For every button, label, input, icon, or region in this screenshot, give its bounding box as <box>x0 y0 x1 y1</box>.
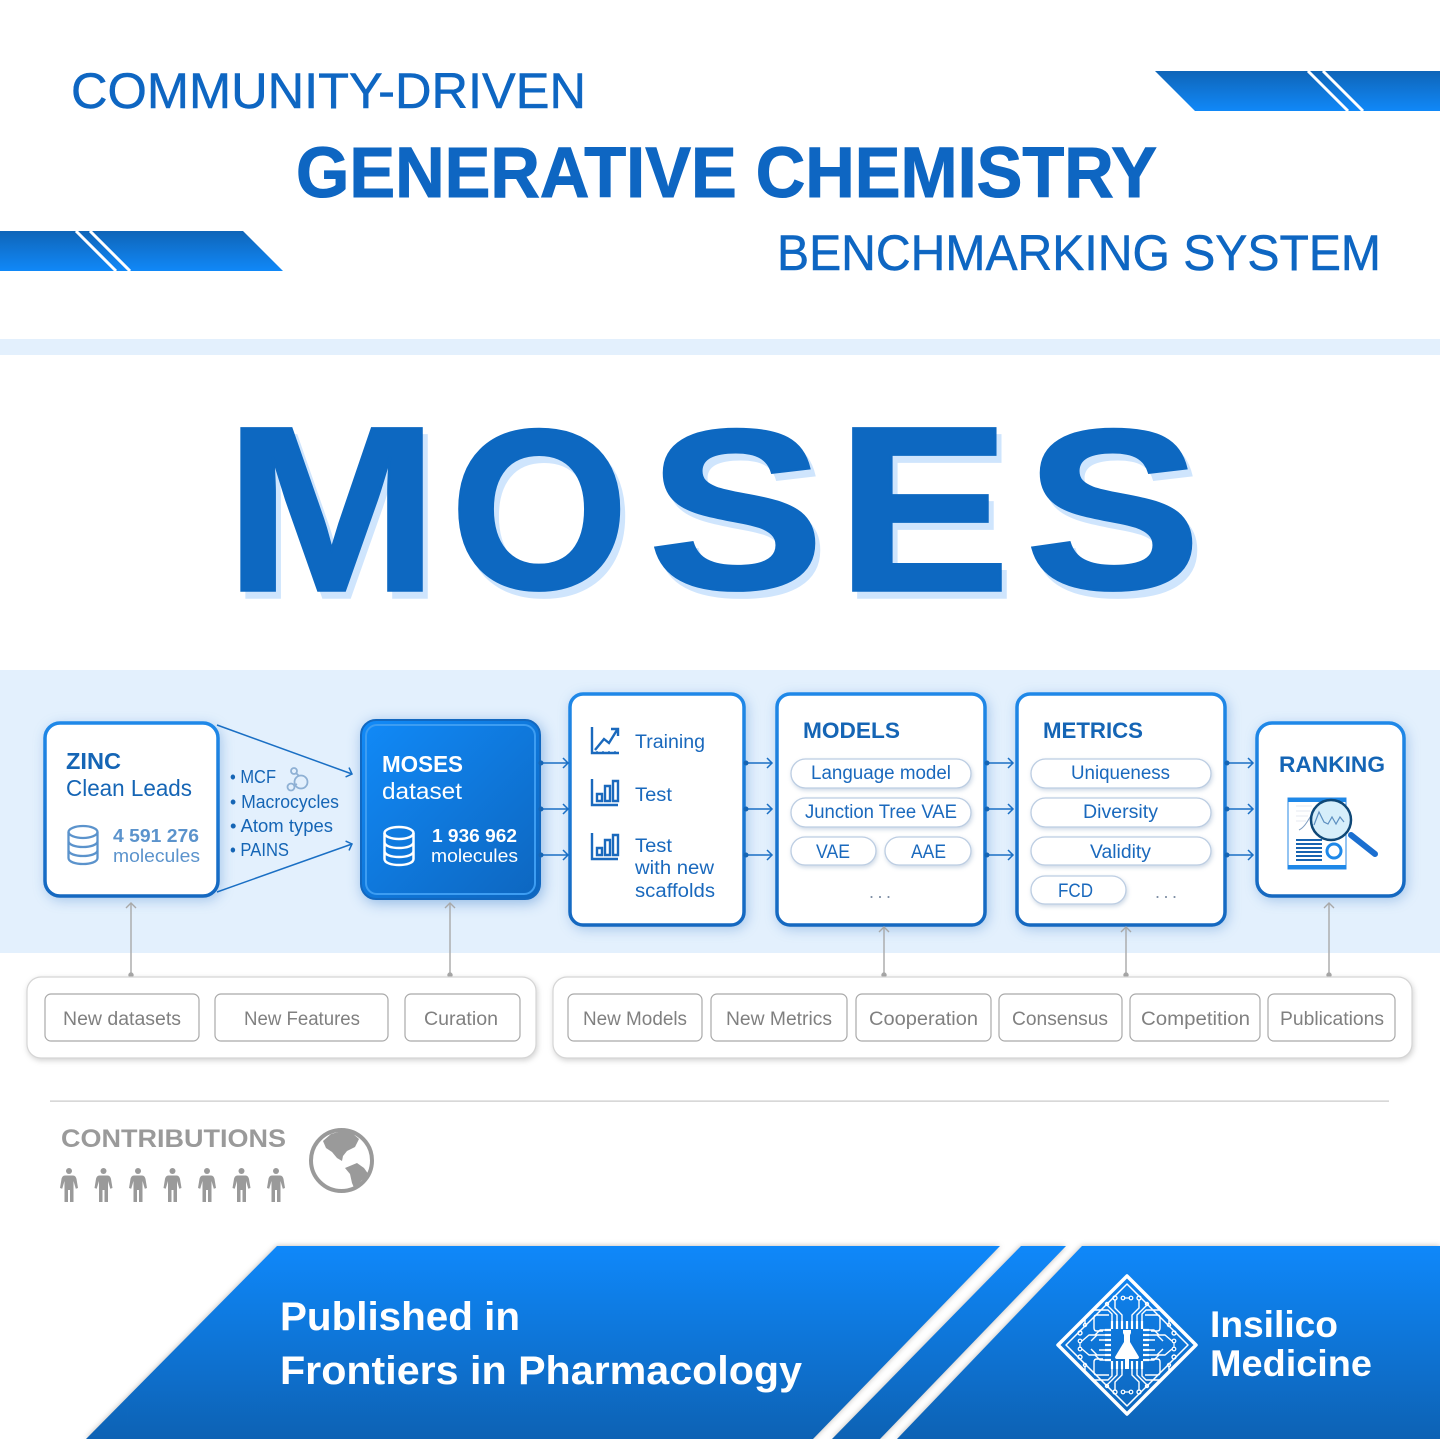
connector arrows: metrics to ranking <box>1224 758 1253 860</box>
pill: VAE <box>791 837 876 865</box>
pill: language model: Language model <box>811 763 951 784</box>
panel: metrics <box>1017 694 1225 925</box>
panel: data splits <box>570 694 744 925</box>
button: new metrics: New Metrics <box>726 1009 832 1030</box>
icon: database <box>68 826 98 864</box>
pill: language model <box>791 759 971 788</box>
test with new scaffolds label: Test <box>635 836 673 857</box>
button: new metrics <box>711 994 847 1041</box>
button: cooperation: Cooperation <box>869 1009 978 1030</box>
metrics title: METRICS <box>1043 718 1143 743</box>
pill: VAE: VAE <box>816 842 850 863</box>
button: curation: Curation <box>424 1009 498 1030</box>
panel: MOSES dataset <box>361 720 540 899</box>
connector arrows: splits to models <box>744 758 772 860</box>
MOSES wordmark <box>224 378 1201 641</box>
button: new features <box>215 994 388 1041</box>
button: new models: New Models <box>583 1009 687 1030</box>
pill: diversity: Diversity <box>1083 802 1159 823</box>
ZINC title: ZINC <box>66 748 121 774</box>
pill: validity: Validity <box>1090 842 1152 863</box>
dataset subtitle: dataset <box>382 778 463 804</box>
MOSES title: MOSES <box>382 751 463 777</box>
logo text: Insilico Medicine: Insilico <box>1210 1304 1338 1345</box>
panel: models <box>777 694 985 925</box>
pale divider band <box>0 339 1440 355</box>
connector arrows: models to metrics <box>984 758 1013 860</box>
test with new scaffolds label <box>634 836 715 902</box>
panel: ZINC clean leads <box>45 723 218 896</box>
pill: uniqueness: Uniqueness <box>1071 763 1170 784</box>
test with new scaffolds label: scaffolds <box>635 881 715 902</box>
icon: report with magnifier <box>1288 798 1375 869</box>
button: curation <box>405 994 520 1041</box>
MOSES wordmark: M <box>224 378 439 641</box>
button: new datasets: New datasets <box>63 1009 181 1030</box>
models title: MODELS <box>803 718 900 743</box>
button: competition: Competition <box>1141 1009 1250 1030</box>
filter list: • Atom types <box>230 816 333 836</box>
ellipsis: ... <box>869 882 895 902</box>
connector arrows: MOSES to splits <box>538 758 569 860</box>
button: consensus <box>999 994 1122 1041</box>
ellipsis: ... <box>1155 882 1181 902</box>
filter list: • Macrocycles <box>230 792 339 812</box>
funnel arrows from ZINC to MOSES dataset <box>217 725 354 892</box>
pill: diversity <box>1031 798 1211 827</box>
logo text: Insilico Medicine <box>1210 1304 1372 1384</box>
filter list: • PAINS <box>230 840 289 860</box>
ranking title: RANKING <box>1279 752 1385 777</box>
button: new datasets <box>45 994 199 1041</box>
button: competition <box>1130 994 1260 1041</box>
heading: benchmarking system: BENCHMARKING SYSTEM <box>777 225 1381 281</box>
heading: community-driven: COMMUNITY-DRIVEN <box>71 63 586 119</box>
test with new scaffolds label: with new <box>634 858 714 879</box>
button: publications <box>1268 994 1395 1041</box>
pill: validity <box>1031 837 1211 865</box>
logo: Insilico Medicine chip flask diamond <box>1058 1276 1196 1414</box>
pill: FCD: FCD <box>1058 881 1093 902</box>
MOSES wordmark: O <box>450 382 629 637</box>
MOSES wordmark: S <box>1025 382 1201 638</box>
panel: dataset contributions <box>27 977 536 1058</box>
pill: AAE: AAE <box>911 842 946 863</box>
icon: training chart <box>592 727 619 753</box>
MOSES wordmark: S <box>648 382 824 638</box>
top right striped banner <box>1155 71 1440 111</box>
pill: junction tree VAE: Junction Tree VAE <box>805 802 957 823</box>
footer banner <box>86 1246 1440 1439</box>
button: consensus: Consensus <box>1012 1009 1108 1030</box>
footer text: published in: Published in <box>280 1295 520 1339</box>
button: new models <box>568 994 702 1041</box>
upward contribution arrows <box>126 903 1334 977</box>
icon: database white <box>384 827 414 865</box>
button: publications: Publications <box>1280 1009 1384 1030</box>
contributions heading: CONTRIBUTIONS <box>61 1125 286 1153</box>
heading: generative chemistry: GENERATIVE CHEMISTRY <box>296 134 1157 213</box>
test label: Test <box>635 785 673 806</box>
pill: uniqueness <box>1031 759 1211 788</box>
panel: ranking <box>1257 723 1404 896</box>
pill: AAE <box>885 837 971 865</box>
icon row: contributors <box>60 1168 285 1202</box>
MOSES wordmark: E <box>836 378 1011 641</box>
logo text: Insilico Medicine: Medicine <box>1210 1343 1372 1384</box>
icon: molecule <box>288 768 308 790</box>
panel: community contributions <box>553 977 1412 1058</box>
left striped banner <box>0 231 283 271</box>
filter list: • MCF <box>230 767 276 787</box>
icon: globe <box>311 1130 372 1191</box>
icon: scaffold test chart <box>592 833 618 859</box>
button: new features: New Features <box>244 1009 360 1030</box>
molecule count: 1 936 962 <box>432 826 517 846</box>
filter list <box>230 767 339 860</box>
molecules label: molecules <box>431 846 518 866</box>
training label: Training <box>635 732 705 753</box>
molecules label: molecules <box>113 846 200 866</box>
pale diagram band <box>0 670 1440 953</box>
molecule count: 4 591 276 <box>113 826 199 846</box>
footer text: journal: Frontiers in Pharmacology <box>280 1349 803 1393</box>
pill: FCD <box>1031 876 1126 904</box>
icon: test chart <box>592 779 618 805</box>
clean leads subtitle: Clean Leads <box>66 775 192 801</box>
button: cooperation <box>856 994 991 1041</box>
pill: junction tree VAE <box>791 798 971 827</box>
